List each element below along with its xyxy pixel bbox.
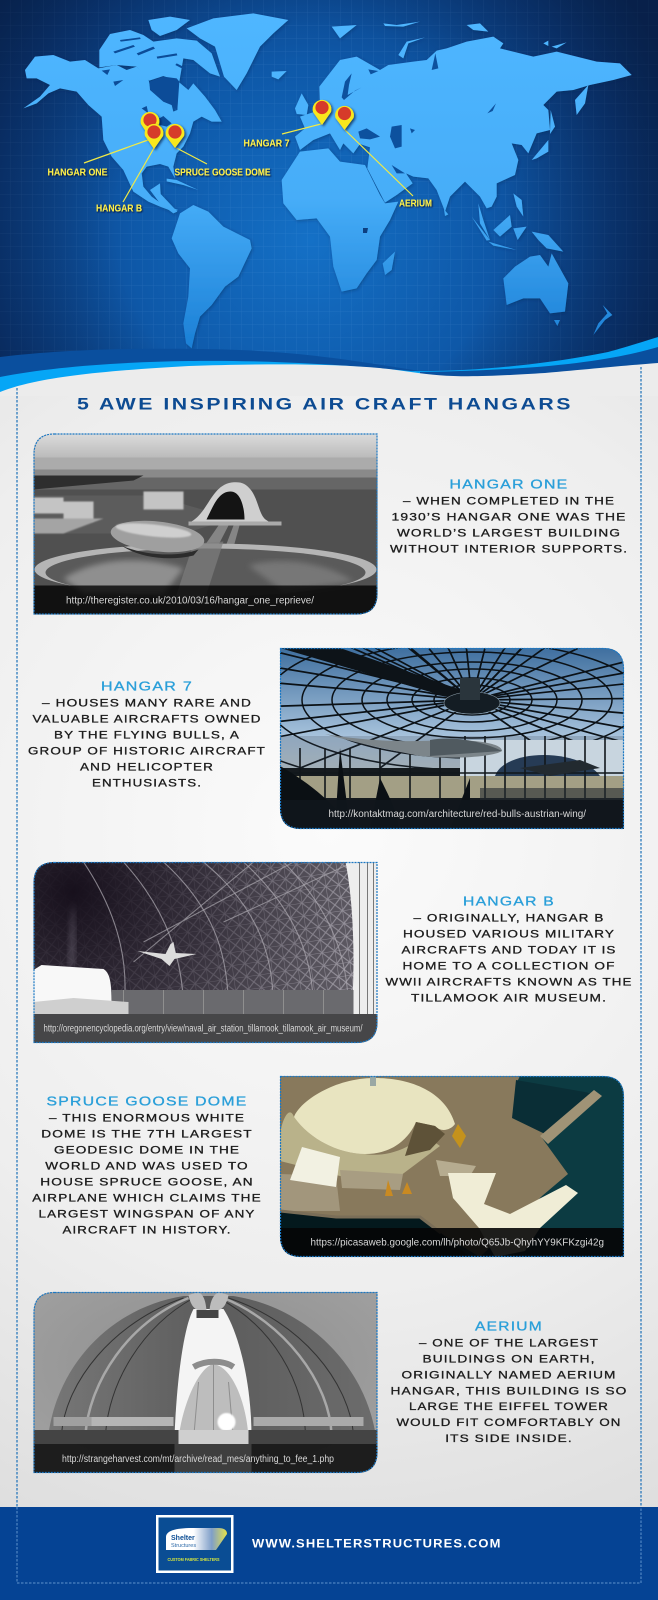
continents xyxy=(23,13,632,348)
description: aerium xyxy=(390,1320,628,1445)
body text: WWII AIRCRAFTS KNOWN AS THE xyxy=(386,977,632,989)
panel: spruce goose dome xyxy=(32,1076,624,1257)
body text xyxy=(390,1337,628,1445)
label: hangar one: HANGAR ONE xyxy=(48,166,108,178)
body text: ENTHUSIASTS. xyxy=(92,777,202,789)
body text: LARGE THE EIFFEL TOWER xyxy=(409,1401,609,1413)
body text: VALUABLE AIRCRAFTS OWNED xyxy=(32,714,262,726)
inland seas xyxy=(102,37,496,233)
body text: WORLD’S LARGEST BUILDING xyxy=(397,527,621,539)
body text: HOUSE SPRUCE GOOSE, AN xyxy=(40,1176,254,1188)
body text: WORLD AND WAS USED TO xyxy=(45,1161,249,1173)
dashed frame xyxy=(17,367,641,1507)
body text: HANGAR, THIS BUILDING IS SO xyxy=(390,1385,628,1397)
body text: DOME IS THE 7TH LARGEST xyxy=(41,1129,253,1141)
panel: hangar one xyxy=(34,434,628,614)
lake victoria xyxy=(363,228,368,233)
body text: AIRPLANE WHICH CLAIMS THE xyxy=(32,1192,262,1204)
source url: http://oregonencyclopedia.org/entry/view/naval_air_station_tillamook_tillamook_air_museum/ xyxy=(44,1024,363,1034)
pin: aerium xyxy=(335,106,354,130)
title: 5 AWE INSPIRING AIR CRAFT HANGARS xyxy=(77,394,573,414)
body text xyxy=(386,913,632,1004)
page background xyxy=(0,340,658,1600)
heading: SPRUCE GOOSE DOME xyxy=(46,1094,248,1108)
heading: HANGAR 7 xyxy=(101,680,193,694)
pin: hangar 7 xyxy=(313,100,331,125)
map background grid xyxy=(0,0,658,385)
panel: hangar b xyxy=(34,862,632,1043)
photo: hangar one xyxy=(34,434,378,614)
heading: AERIUM xyxy=(475,1320,543,1334)
description: hangar b xyxy=(386,894,632,1004)
photo: hangar 7 xyxy=(280,648,624,830)
pin: hangar b xyxy=(145,124,163,149)
description: hangar one xyxy=(390,478,628,555)
pin: hangar one xyxy=(141,112,159,138)
photo: hangar b xyxy=(34,862,378,1043)
panel: hangar 7 xyxy=(28,648,624,830)
heading: HANGAR B xyxy=(463,894,555,908)
body text: GROUP OF HISTORIC AIRCRAFT xyxy=(28,745,266,757)
body text: TILLAMOOK AIR MUSEUM. xyxy=(411,992,607,1004)
footer xyxy=(0,1507,658,1600)
north american waters xyxy=(102,37,187,127)
source url: http://strangeharvest.com/mt/archive/read_mes/anything_to_fee_1.php xyxy=(62,1454,334,1465)
leader lines xyxy=(84,124,413,202)
north america and greenland xyxy=(23,13,308,212)
body text: HOME TO A COLLECTION OF xyxy=(402,961,616,973)
label: aerium: AERIUM xyxy=(399,198,432,210)
logo xyxy=(156,1515,234,1573)
body text: AIRCRAFTS AND TODAY IT IS xyxy=(402,945,616,957)
body text xyxy=(390,495,628,555)
body text: ORIGINALLY NAMED AERIUM xyxy=(402,1369,616,1381)
body text: – ORIGINALLY, HANGAR B xyxy=(414,913,604,925)
label: hangar 7: HANGAR 7 xyxy=(244,138,290,150)
description: spruce goose dome xyxy=(32,1094,262,1236)
photo: spruce goose dome xyxy=(280,1076,624,1257)
body text: ITS SIDE INSIDE. xyxy=(445,1433,573,1445)
body text: HOUSED VARIOUS MILITARY xyxy=(403,929,615,941)
map pins and labels xyxy=(48,100,432,214)
body text: 1930’S HANGAR ONE WAS THE xyxy=(392,511,626,523)
heading: HANGAR ONE xyxy=(450,478,568,492)
world map panel xyxy=(0,0,658,385)
body text: – ONE OF THE LARGEST xyxy=(419,1337,599,1349)
panel: aerium xyxy=(34,1292,628,1473)
body text: LARGEST WINGSPAN OF ANY xyxy=(38,1208,256,1220)
label: hangar b: HANGAR B xyxy=(96,202,142,214)
body text xyxy=(28,698,266,789)
body text: – HOUSES MANY RARE AND xyxy=(42,698,252,710)
southern continents and islands xyxy=(150,148,612,348)
wave divider xyxy=(0,337,658,396)
eurasia xyxy=(295,22,632,212)
logo: Structures xyxy=(171,1543,196,1549)
body text: AIRCRAFT IN HISTORY. xyxy=(62,1224,232,1236)
pin: spruce goose dome xyxy=(166,124,184,148)
logo: CUSTOM FABRIC SHELTERS xyxy=(168,1557,220,1562)
source url: http://kontaktmag.com/architecture/red-bulls-austrian-wing/ xyxy=(328,809,586,820)
body text: GEODESIC DOME IN THE xyxy=(54,1145,240,1157)
source url: https://picasaweb.google.com/lh/photo/Q65Jb-QhyhYY9KFKzgi42g xyxy=(310,1238,604,1248)
eurasian waters xyxy=(342,53,496,173)
photo: aerium xyxy=(34,1292,378,1473)
body text: BY THE FLYING BULLS, A xyxy=(54,730,240,742)
body text xyxy=(32,1113,262,1236)
body text: WOULD FIT COMFORTABLY ON xyxy=(396,1417,622,1429)
body text: – THIS ENORMOUS WHITE xyxy=(49,1113,245,1125)
source url: http://theregister.co.uk/2010/03/16/hangar_one_reprieve/ xyxy=(66,596,314,606)
website url: WWW.SHELTERSTRUCTURES.COM xyxy=(252,1538,502,1550)
logo: Shelter xyxy=(171,1535,195,1542)
body text: AND HELICOPTER xyxy=(80,761,214,773)
body text: BUILDINGS ON EARTH, xyxy=(422,1353,596,1365)
body text: – WHEN COMPLETED IN THE xyxy=(403,495,615,507)
label: spruce goose dome: SPRUCE GOOSE DOME xyxy=(174,166,270,178)
description: hangar 7 xyxy=(28,680,266,789)
body text: WITHOUT INTERIOR SUPPORTS. xyxy=(390,543,628,555)
